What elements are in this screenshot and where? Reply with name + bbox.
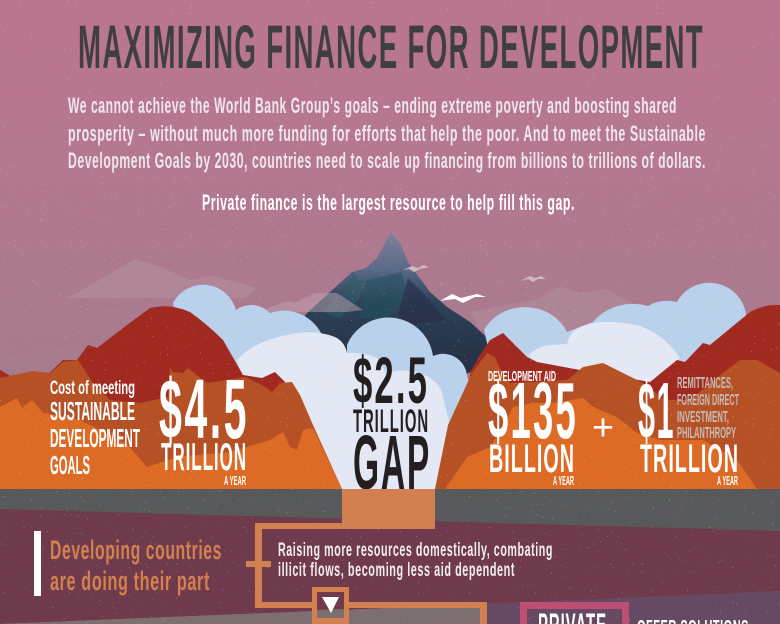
white clouds right (528, 322, 680, 385)
purple lower ground (487, 591, 780, 624)
plus sign: + (592, 407, 614, 448)
dark central mountain peak (305, 232, 492, 400)
icon: small bird right (520, 276, 546, 282)
grey road band (0, 489, 780, 534)
developing countries heading (50, 535, 222, 596)
orange flow connector (246, 489, 487, 624)
stat: development aid 135 billion a year (488, 366, 578, 488)
developing countries heading: are doing their part (50, 566, 210, 596)
stat: development aid 135 billion a year: A YEAR (553, 473, 574, 488)
dark red hills right (470, 305, 780, 489)
maroon band (0, 509, 780, 624)
infographic canvas: DEVELOPMENT (50, 423, 140, 453)
intro paragraph (68, 93, 706, 173)
other flows list: INVESTMENT, (677, 409, 729, 426)
developing countries heading: Developing countries (50, 535, 222, 565)
infographic canvas: TRILLION (353, 403, 429, 439)
white accent bar (34, 531, 41, 596)
cost of meeting goals label: Cost of meeting (50, 378, 135, 399)
blue clouds centre (347, 317, 480, 440)
pale distant mountains left (68, 259, 258, 298)
arrow box (312, 587, 349, 624)
white clouds left and centre (237, 332, 450, 490)
infographic canvas: $4.5 (159, 362, 249, 456)
infographic canvas: SUSTAINABLE (50, 396, 135, 426)
stat: 4.5 trillion a year: A YEAR (224, 473, 246, 488)
pale distant mountains right (470, 286, 660, 335)
stat: development aid 135 billion a year: BILLION (489, 437, 575, 481)
stat: 2.5 trillion gap (353, 343, 431, 506)
stat: 4.5 trillion a year (159, 362, 249, 488)
bright orange foothills right (445, 398, 757, 489)
domestic resources text (278, 540, 553, 581)
icon: small bird on peak (403, 265, 429, 272)
domestic resources text: illicit flows, becoming less aid dependent (278, 560, 515, 581)
cost of meeting goals label: GOALS (50, 450, 90, 480)
pale mountain overlapping peak (258, 293, 363, 312)
domestic resources text: Raising more resources domestically, combating (278, 540, 553, 561)
cost of meeting goals label (50, 378, 140, 480)
stat: 2.5 trillion gap: $2.5 (353, 343, 429, 417)
other flows list (677, 375, 739, 442)
bright orange foothills left (0, 398, 342, 489)
grey lower ground (0, 604, 487, 624)
blue clouds right (484, 283, 760, 400)
dark red hills left (0, 306, 285, 420)
stat: development aid 135 billion a year: DEVELOPMENT AID (488, 368, 556, 385)
infographic canvas: GAP (353, 420, 431, 506)
mid orange hills right (435, 353, 780, 489)
icon: large white bird (440, 294, 486, 303)
infographic canvas: A YEAR (717, 473, 738, 488)
blue clouds left (173, 285, 345, 430)
infographic canvas: $135 (488, 366, 578, 455)
infographic canvas: TRILLION (161, 436, 247, 479)
private box (524, 606, 626, 624)
stat: 1 trillion a year: $1 (638, 366, 675, 455)
mid orange hills left (0, 360, 342, 489)
